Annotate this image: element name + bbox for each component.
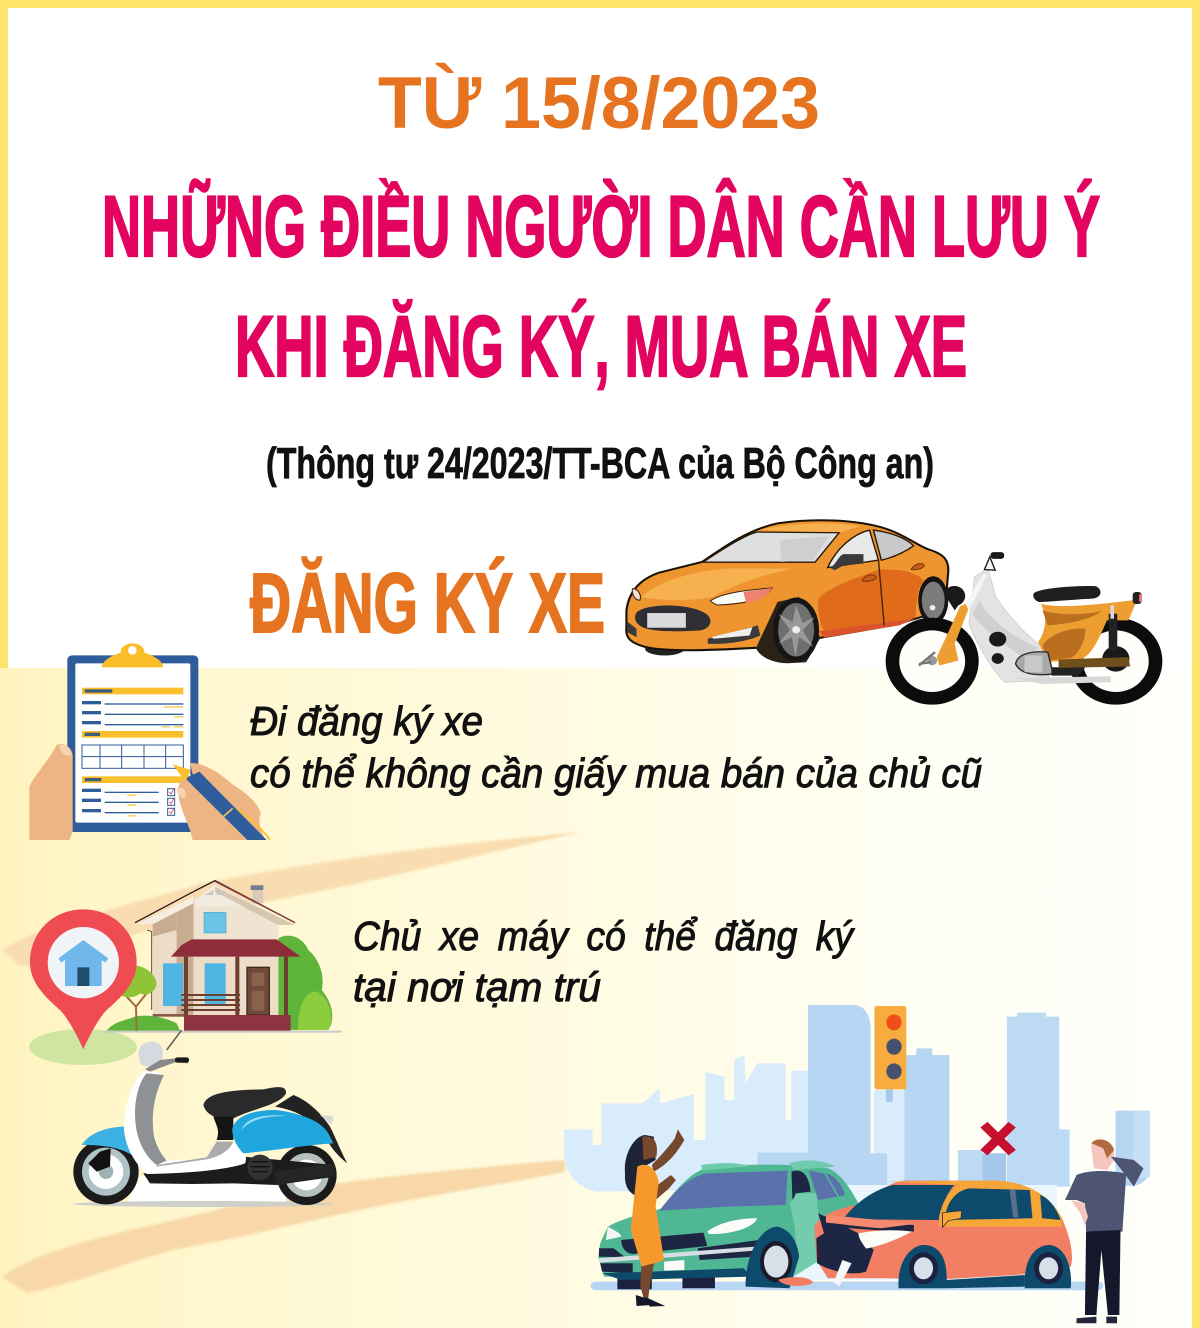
orange car	[814, 1181, 1072, 1288]
windscreen	[703, 532, 839, 562]
front fender	[82, 1127, 142, 1163]
form lines	[82, 701, 183, 813]
left window	[163, 963, 183, 1006]
chimney	[252, 885, 263, 903]
hood highlight	[641, 569, 792, 600]
icon: clipboard with form and hands	[29, 643, 270, 840]
green car	[598, 1160, 860, 1289]
board	[67, 655, 198, 832]
seat	[203, 1087, 286, 1119]
person: man in grey shirt	[1065, 1139, 1143, 1323]
rear door panel	[880, 570, 923, 625]
small tree	[112, 965, 157, 1031]
icon: house	[103, 881, 342, 1033]
right hand	[178, 763, 265, 840]
porch roof	[171, 939, 301, 957]
blue side panel	[232, 1110, 333, 1153]
under engine	[1051, 667, 1085, 676]
icon: orange car	[626, 520, 948, 663]
bushes	[278, 936, 332, 1030]
gutter	[147, 930, 152, 1010]
check boxes	[168, 789, 175, 815]
front fork	[937, 602, 969, 666]
rear light	[1133, 592, 1142, 604]
centre window	[205, 963, 226, 1006]
clip	[102, 643, 163, 667]
left hand	[29, 744, 73, 840]
item one text: Đi đăng ký xe	[250, 698, 483, 744]
title: date: TỪ 15/8/2023	[378, 63, 820, 144]
crumpled bumper	[816, 1213, 874, 1273]
railing	[181, 995, 240, 1010]
upper window	[204, 912, 226, 933]
front door panel	[818, 570, 884, 632]
engine	[1016, 652, 1053, 675]
foot rail	[1014, 676, 1111, 684]
tail	[275, 1095, 347, 1163]
fog lamp	[708, 625, 760, 644]
debris	[778, 1277, 813, 1286]
side window rear	[873, 530, 914, 560]
icon: motorbike	[886, 552, 1162, 705]
steps	[184, 1015, 291, 1031]
item two text	[353, 913, 855, 1010]
form heading bars	[82, 688, 183, 783]
mirror	[829, 554, 863, 570]
fingers	[177, 788, 185, 798]
item two text: Chủ xe máy có thể đăng ký	[353, 913, 855, 959]
rear wheel	[277, 1145, 337, 1205]
item two text: tại nơi tạm trú	[353, 964, 601, 1010]
rear wheel	[918, 576, 948, 624]
city skyline	[564, 1005, 1150, 1280]
shock absorber	[1109, 614, 1117, 650]
headlamp	[138, 1042, 163, 1066]
icon: green ground ellipse under location pin	[29, 1029, 137, 1065]
leg shield white	[124, 1072, 246, 1174]
green car front wheel	[746, 1227, 799, 1288]
rear wheel	[1069, 618, 1162, 705]
orange car wheels	[898, 1245, 1071, 1288]
walls	[153, 897, 278, 1017]
roof highlight	[760, 523, 860, 533]
orange body	[1038, 600, 1137, 662]
icon: blue scooter	[73, 1030, 347, 1207]
house glyph	[58, 940, 108, 986]
item one text	[250, 698, 982, 796]
traffic light	[874, 1006, 906, 1102]
side window front	[828, 530, 878, 568]
door	[247, 967, 269, 1015]
item one text: có thể không cần giấy mua bán của chủ cũ	[250, 750, 982, 796]
pen	[173, 764, 270, 840]
white frame	[969, 569, 1050, 682]
ground line	[103, 1031, 342, 1033]
lower background panel	[0, 668, 1200, 1328]
section heading: ĐĂNG KÝ XE	[250, 556, 605, 650]
chain guard	[1059, 657, 1130, 668]
red cross	[984, 1125, 1012, 1153]
front wheel	[73, 1139, 139, 1204]
brush stroke upper	[2, 832, 582, 966]
mirror	[167, 1030, 182, 1050]
front wheel	[886, 618, 979, 705]
person: woman in orange dress	[625, 1129, 684, 1307]
front wheel	[756, 597, 820, 663]
handlebar	[984, 557, 995, 570]
illustration: car accident scene	[564, 1005, 1150, 1323]
headlight	[710, 588, 772, 605]
brush stroke lower	[2, 1160, 565, 1293]
roof lines	[135, 881, 295, 923]
subtitle: legal source: (Thông tư 24/2023/TT-BCA của Bộ Công an)	[266, 439, 934, 488]
table	[82, 745, 183, 768]
engine vent	[247, 1155, 273, 1180]
seat	[1033, 586, 1101, 602]
grille	[635, 606, 711, 631]
icon: location pin	[30, 909, 137, 1049]
white base and shadow	[127, 1177, 287, 1203]
grey inner panel	[135, 1073, 167, 1165]
lower frame dark	[143, 1157, 335, 1185]
porch posts	[184, 957, 288, 1015]
ground	[591, 1282, 1103, 1290]
